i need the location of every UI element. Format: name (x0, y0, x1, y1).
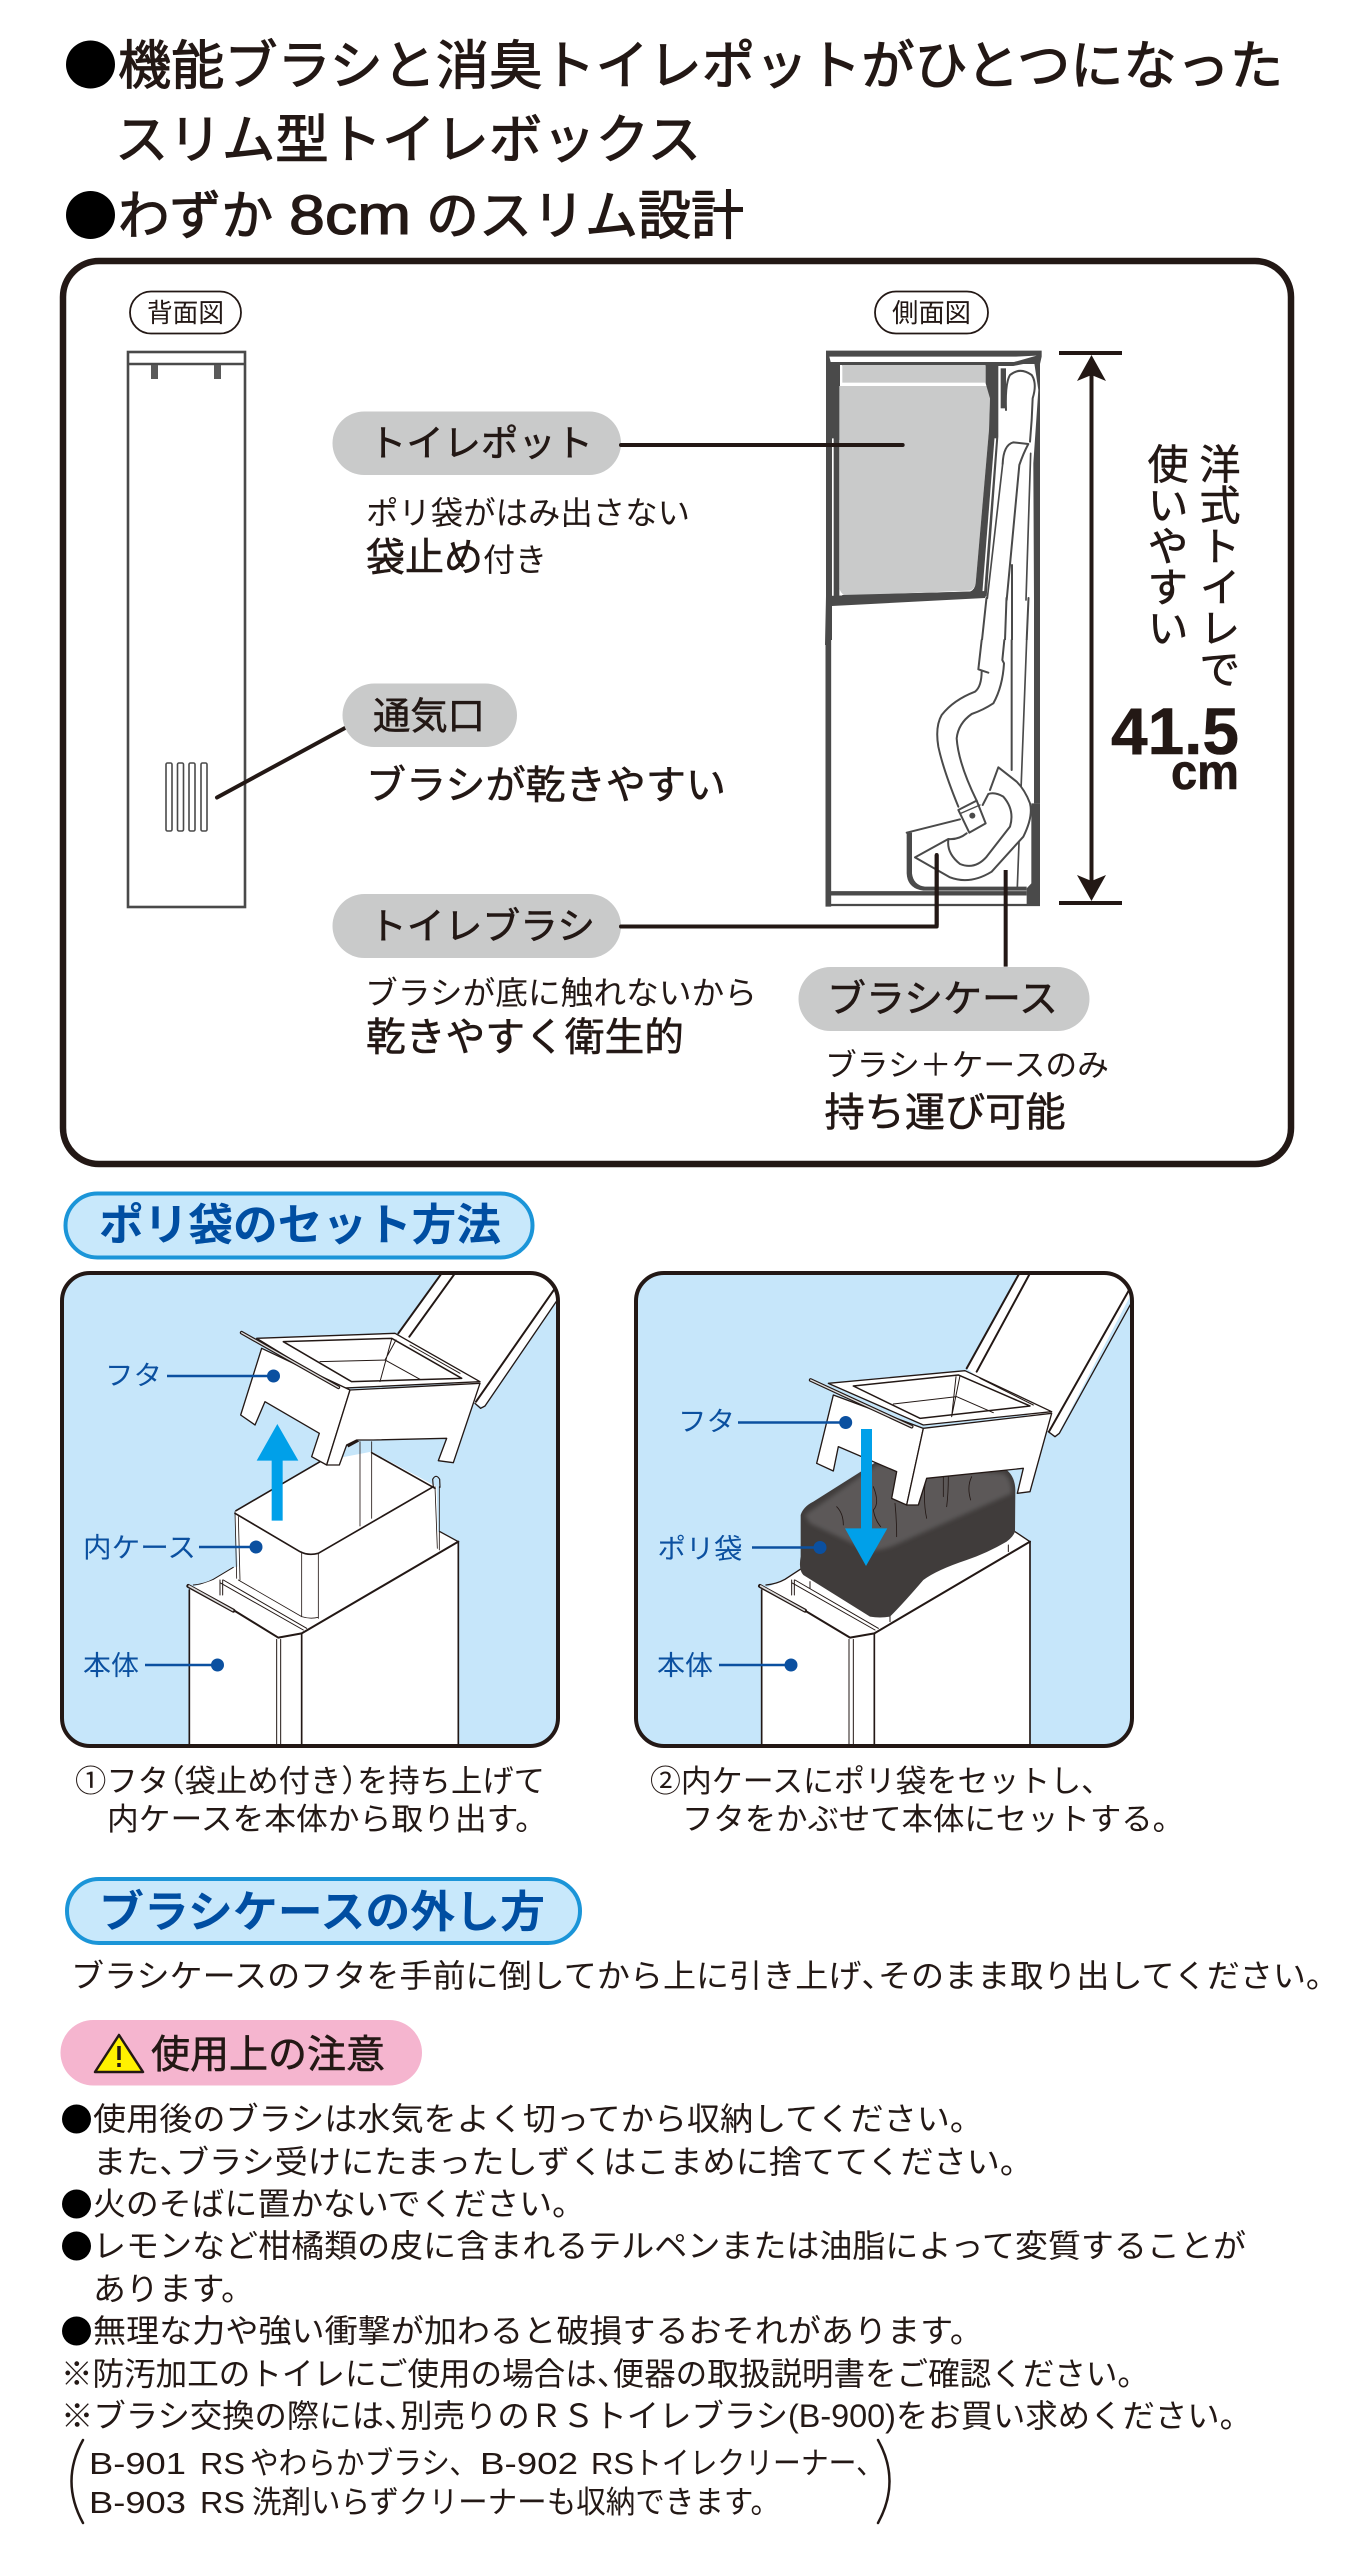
panel: product diagram (63, 261, 1291, 1164)
title: のスリム設計 (426, 187, 744, 246)
text: caution list: レモンなど柑橘類の皮に含まれるテルペンまたは油脂によって変質することが (93, 2228, 1246, 2264)
text: caution list: 無理な力や強い衝撃が加わると破損するおそれがあります。 (93, 2313, 983, 2349)
label: inner case: 内ケース (83, 1532, 196, 1563)
illustration: step 1 box (188, 1273, 563, 1747)
text: caution list: 使用後のブラシは水気をよく切ってから収納してください。 (93, 2101, 983, 2137)
text: bracketed note: RS (200, 2485, 245, 2520)
title: わずか (118, 187, 273, 246)
text: bracketed note: RS (591, 2446, 634, 2481)
back view label: 背面図 (147, 298, 224, 328)
title (66, 37, 1283, 246)
callout: toilet brush: 乾きやすく衛生的 (366, 1016, 684, 1060)
label: main body (83, 1651, 224, 1681)
height text: 41.5 (1111, 694, 1239, 768)
height text: cm (1171, 744, 1239, 800)
panel: step 1 (62, 1273, 563, 1747)
caption: step 1 (75, 1764, 547, 1837)
vent leader line (217, 728, 345, 798)
text: caution list: 火のそばに置かないでください。 (93, 2186, 585, 2222)
text: caution list: ※ブラシ交換の際には、別売りのＲＳトイレブラシ(B-900)をお買い求めください。 (61, 2398, 1252, 2434)
caption: step 2: ②内ケースにポリ袋をセットし、 (650, 1764, 1112, 1799)
caption: step 2 (650, 1764, 1184, 1837)
title: スリム型トイレボックス (115, 111, 701, 170)
heading: poly bag setup (66, 1194, 532, 1258)
label: poly bag (658, 1533, 826, 1564)
caption: step 2: フタをかぶせて本体にセットする。 (682, 1802, 1184, 1837)
text: bracketed note: B-902 (480, 2446, 578, 2481)
back view drawing (128, 352, 245, 907)
text: bracketed note: RS (200, 2446, 245, 2481)
title: 機能ブラシと消臭トイレポットがひとつになった (118, 37, 1283, 96)
label: lid (678, 1407, 852, 1437)
label: inner case (83, 1532, 262, 1563)
callout: brush case: ブラシ＋ケースのみ (825, 1048, 1109, 1083)
height text: 洋式トイレで (1193, 443, 1240, 689)
label: lid (105, 1361, 280, 1391)
text: caution list (61, 2101, 1252, 2434)
height text: 使いやすい (1141, 443, 1188, 648)
panel: step 2 (636, 1273, 1133, 1747)
heading: removing the brush case: ブラシケースの外し方 (99, 1888, 545, 1937)
heading: usage cautions (60, 2020, 422, 2086)
label: poly bag: ポリ袋 (658, 1533, 742, 1564)
text: caution list: ※防汚加工のトイレにご使用の場合は、便器の取扱説明書をご確認ください。 (61, 2356, 1149, 2392)
text: bracketed note: トイレクリーナー、 (634, 2446, 884, 2481)
side view drawing (810, 351, 1042, 967)
icon: warning triangle (95, 2035, 143, 2072)
label: main body: 本体 (83, 1651, 139, 1681)
callout: toilet pot: 袋止め (366, 537, 483, 580)
callout: brush case (798, 967, 1109, 1135)
label: main body (657, 1651, 798, 1681)
back view label (130, 292, 241, 334)
side view label (875, 292, 988, 334)
heading: removing the brush case (67, 1879, 580, 1943)
caption: step 1: 内ケースを本体から取り出す。 (107, 1802, 547, 1837)
callout: toilet pot (332, 412, 690, 580)
callout: vent: ブラシが乾きやすい (366, 764, 726, 808)
heading: usage cautions: 使用上の注意 (151, 2034, 385, 2077)
label: main body: 本体 (657, 1651, 713, 1681)
callout: vent (342, 684, 726, 808)
text: removal instructions: ブラシケースのフタを手前に倒してから上に引き上げ 、そのまま取り出してください。 (71, 1958, 1339, 1994)
text: bracketed note (72, 2440, 890, 2523)
height text (1111, 443, 1240, 800)
label: lid: フタ (105, 1361, 162, 1391)
text: caution list: また、ブラシ受けにたまったしずくはこまめに捨ててください。 (93, 2144, 1033, 2180)
illustration: step 2 box (760, 1273, 1133, 1747)
callout: toilet brush: トイレブラシ (369, 906, 595, 947)
text: bracketed note: B-903 (89, 2485, 186, 2520)
text: bracketed note: 洗剤いらずクリーナーも収納できます。 (252, 2485, 780, 2520)
text: bracketed note: B-901 (89, 2446, 186, 2481)
height dimension arrow (1059, 353, 1122, 903)
leader: toilet pot line (621, 443, 812, 447)
leader: toilet brush line (621, 855, 937, 926)
callout: vent: 通気口 (373, 695, 485, 737)
text: caution list: あります。 (93, 2271, 254, 2307)
callout: brush case: 持ち運び可能 (824, 1091, 1066, 1135)
title: 8cm (289, 183, 411, 246)
callout: toilet pot: ポリ袋がはみ出さない (366, 495, 690, 531)
callout: toilet brush (332, 894, 757, 1060)
text: bracketed note: やわらかブラシ、 (250, 2446, 478, 2481)
label: lid: フタ (678, 1407, 735, 1437)
callout: brush case: ブラシケース (827, 979, 1058, 1021)
heading: poly bag setup: ポリ袋のセット方法 (99, 1201, 501, 1250)
callout: toilet pot: 付き (483, 542, 547, 578)
caption: step 1: ①フタ（袋止め付き）を持ち上げて (75, 1764, 545, 1799)
side view label: 側面図 (892, 298, 971, 328)
callout: toilet pot: トイレポット (369, 423, 593, 464)
callout: toilet brush: ブラシが底に触れないから (365, 975, 757, 1011)
